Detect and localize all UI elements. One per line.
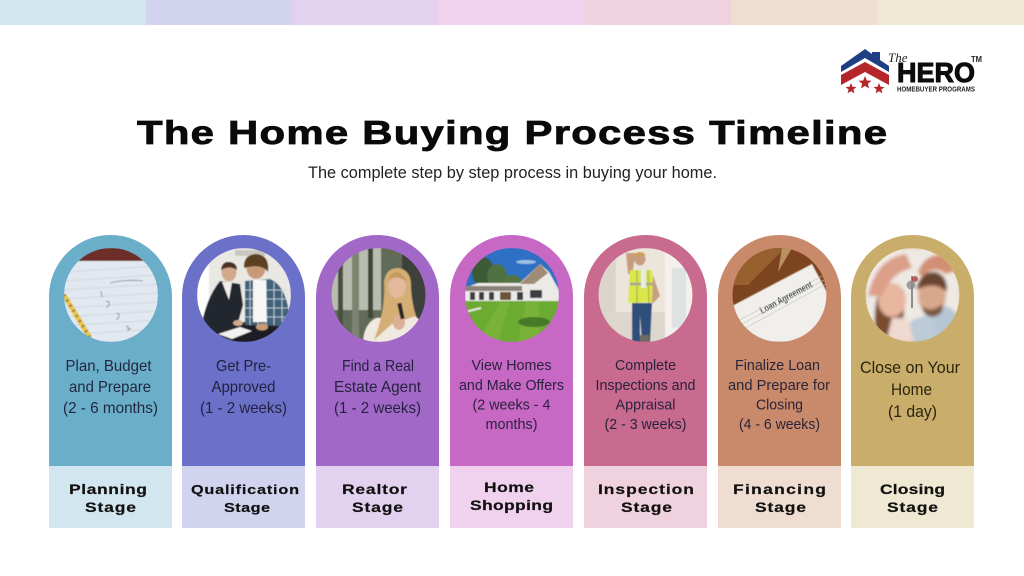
stage label: Stage xyxy=(755,501,806,516)
step text: Get Pre- xyxy=(216,358,271,375)
logo: The Hero Homebuyer Programs xyxy=(841,49,982,94)
stage label: Stage xyxy=(887,501,938,516)
panel: financing stage xyxy=(718,235,841,528)
step text: Close on Your xyxy=(860,358,960,377)
stage label: Home xyxy=(484,481,534,496)
panel: planning stage xyxy=(49,235,172,528)
step text: (4 - 6 weeks) xyxy=(739,416,820,433)
stage label: Stage xyxy=(352,501,403,516)
photo: couple holding house keys xyxy=(865,248,960,342)
stage label xyxy=(49,466,172,528)
step text xyxy=(728,357,830,433)
step text: (2 - 6 months) xyxy=(63,400,158,417)
step text: (2 - 3 weeks) xyxy=(604,416,686,433)
stage label: Qualification xyxy=(191,483,299,498)
panel: realtor stage xyxy=(316,235,439,528)
photo: loan agreement document xyxy=(732,248,827,342)
step text: Find a Real xyxy=(342,358,414,375)
top colour band xyxy=(0,0,1024,25)
step text: (1 - 2 weeks) xyxy=(200,400,287,417)
step text: Appraisal xyxy=(616,396,676,414)
icon: house roof and stars xyxy=(841,49,889,93)
subtitle: The complete step by step process in buying your home. xyxy=(308,163,717,182)
step text xyxy=(334,358,422,417)
arch xyxy=(49,235,172,466)
logo wordmark: HOMEBUYER PROGRAMS xyxy=(897,86,975,94)
stage label: Financing xyxy=(733,483,826,498)
stage label xyxy=(450,466,573,528)
stage label: Inspection xyxy=(598,483,694,498)
arch xyxy=(718,235,841,466)
step text xyxy=(63,358,158,417)
photo: notepad checklist xyxy=(64,248,158,342)
step text xyxy=(200,358,287,417)
arch xyxy=(182,235,305,466)
logo wordmark: TM xyxy=(971,55,982,64)
arch xyxy=(316,235,439,466)
step text: View Homes xyxy=(472,357,552,374)
step text: and Make Offers xyxy=(459,377,564,394)
step text xyxy=(596,357,696,433)
stage label: Shopping xyxy=(470,499,553,514)
logo wordmark: HERO xyxy=(897,57,975,88)
step text xyxy=(459,357,564,433)
step text: (2 weeks - 4 xyxy=(472,396,550,414)
logo wordmark xyxy=(888,50,982,94)
step text xyxy=(860,358,960,421)
photo: two men reviewing papers xyxy=(197,248,291,342)
arch xyxy=(584,235,707,466)
step text: (1 day) xyxy=(888,402,937,421)
title: The Home Buying Process Timeline xyxy=(137,115,887,152)
panel: closing stage xyxy=(851,235,974,528)
step text: Estate Agent xyxy=(334,379,422,396)
step text: Home xyxy=(891,380,932,399)
step text: (1 - 2 weeks) xyxy=(334,400,421,417)
stage label xyxy=(851,466,974,528)
stage label: Closing xyxy=(880,483,945,498)
photo: house with green lawn xyxy=(465,248,559,342)
step text: and Prepare xyxy=(69,379,151,396)
arch xyxy=(851,235,974,466)
step text: Approved xyxy=(212,379,276,396)
panel: home shopping stage xyxy=(450,235,573,528)
step text: months) xyxy=(486,416,538,433)
step text: Complete xyxy=(615,357,676,374)
panel: inspection stage xyxy=(584,235,707,528)
stage label xyxy=(182,466,305,528)
stage label xyxy=(316,466,439,528)
photo: loan agreement document: Loan Agreement xyxy=(758,279,815,317)
stage label: Planning xyxy=(69,483,147,498)
stage label: Realtor xyxy=(342,483,407,498)
step text: and Prepare for xyxy=(728,377,830,394)
logo wordmark: The xyxy=(888,50,908,65)
step text: Finalize Loan xyxy=(735,357,820,374)
step text: Inspections and xyxy=(596,377,696,394)
step text: Plan, Budget xyxy=(66,358,152,375)
stage label xyxy=(584,466,707,528)
photo: smiling real estate agent xyxy=(331,248,426,342)
stage label: Stage xyxy=(85,501,136,516)
step text: Closing xyxy=(756,396,803,414)
panel: qualification stage xyxy=(182,235,305,528)
stage label: Stage xyxy=(224,501,270,516)
stage label xyxy=(718,466,841,528)
stage label: Stage xyxy=(621,501,672,516)
photo: inspector in hi-vis vest xyxy=(598,248,693,342)
arch xyxy=(450,235,573,466)
